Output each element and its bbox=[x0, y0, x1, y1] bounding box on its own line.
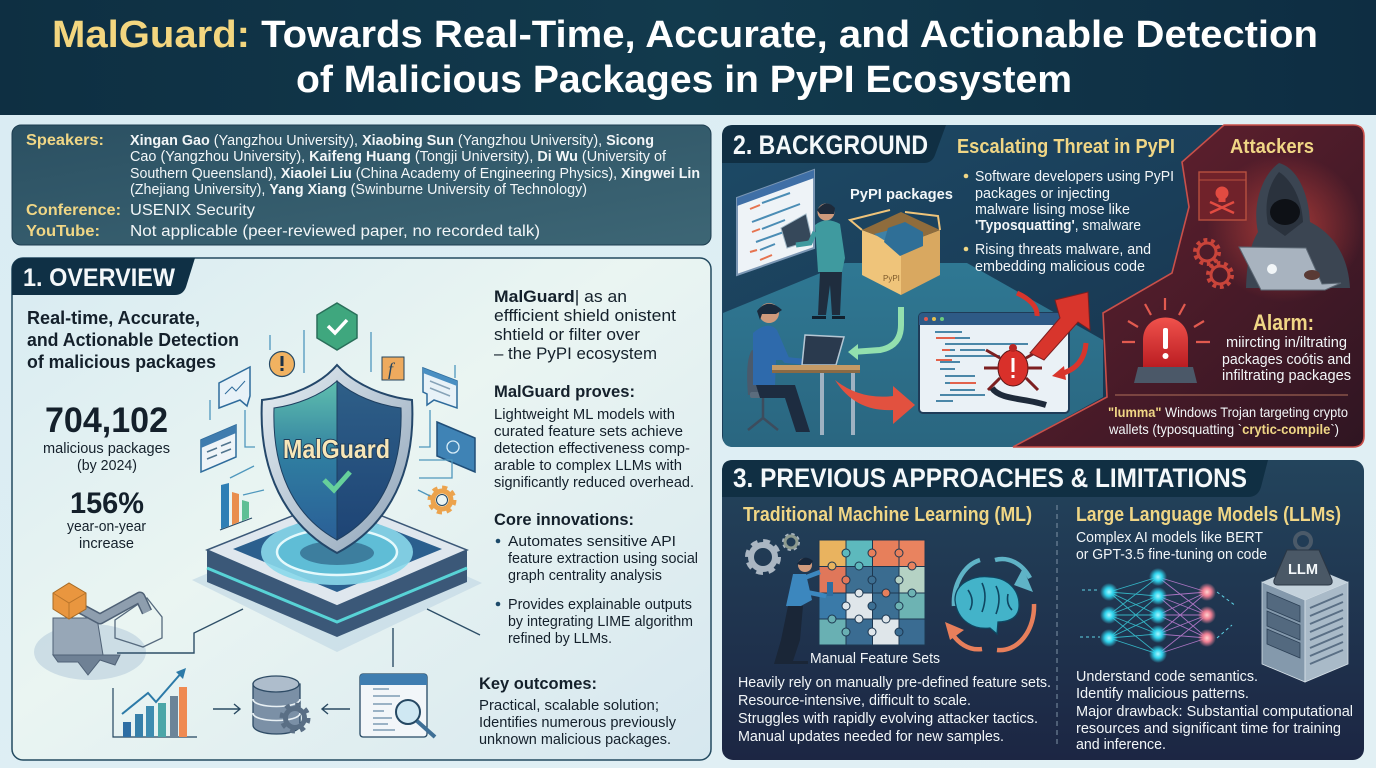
illustration: neural network bbox=[1080, 568, 1236, 663]
LLM intro text bbox=[1076, 530, 1267, 563]
red glow behind hacker bbox=[1207, 154, 1363, 302]
icon: bar mini chart bbox=[220, 483, 252, 530]
stat: 156%: 156% bbox=[70, 487, 144, 520]
threat bullets: packages or injecting bbox=[975, 186, 1110, 202]
icon: LLM weight: LLM bbox=[1288, 561, 1318, 578]
overview subtitle: and Actionable Detection bbox=[27, 330, 239, 350]
background heading: 2. BACKGROUND bbox=[733, 130, 928, 160]
illustration: seated developer bbox=[747, 303, 860, 435]
icon: brain with cycle arrows bbox=[945, 559, 1034, 650]
lumma trojan note: wallets (typosquatting `crytic-compile`) bbox=[1108, 421, 1339, 437]
text: MalGuard intro: shtield or filter over bbox=[494, 325, 640, 344]
conference row bbox=[26, 202, 255, 219]
shield check bbox=[324, 472, 350, 490]
traditional ML heading: Traditional Machine Learning (ML) bbox=[743, 504, 1032, 526]
text: MalGuard proves bbox=[494, 382, 694, 491]
speakers list: Cao (Yangzhou University), Kaifeng Huang (Tongji University), Di Wu (University of bbox=[130, 149, 667, 165]
alarm text bbox=[1222, 310, 1351, 384]
text: core innovations: Automates sensitive API bbox=[508, 534, 676, 550]
overview subtitle: Real-time, Accurate, bbox=[27, 308, 200, 328]
icon: function tag bbox=[382, 357, 404, 380]
arrow: red to window bbox=[835, 380, 915, 424]
threat bullets: embedding malicious code bbox=[975, 259, 1145, 275]
LLM capability text: Identify malicious patterns. bbox=[1076, 686, 1249, 702]
LLM capability text: Understand code semantics. bbox=[1076, 669, 1258, 685]
illustration: skull window bbox=[1199, 172, 1246, 220]
icon: function tag: f bbox=[388, 359, 396, 379]
shield label: MalGuard bbox=[283, 434, 390, 464]
icon: LLM weight bbox=[1274, 533, 1332, 585]
text: MalGuard intro bbox=[494, 287, 676, 363]
text: core innovations: graph centrality analysis bbox=[508, 568, 662, 584]
stat: 704,102: malicious packages bbox=[43, 440, 170, 457]
speakers list: Southern Queensland), Xiaolei Liu (China Academy of Engineering Physics), Xingwei Lin bbox=[130, 166, 700, 182]
icon: ML gears bbox=[749, 535, 798, 571]
icon: MalGuard shield bbox=[262, 365, 412, 553]
alarm text: infiltrating packages bbox=[1222, 368, 1351, 384]
text: core innovations: Provides explainable outputs bbox=[508, 597, 692, 613]
text: core innovations: by integrating LIME algorithm bbox=[508, 614, 693, 630]
attackers heading: Attackers bbox=[1230, 136, 1314, 158]
red attackers zone bbox=[1013, 125, 1364, 447]
LLM capability text: and inference. bbox=[1076, 737, 1166, 753]
text: MalGuard intro: MalGuard| as an bbox=[494, 287, 627, 306]
ML limitations text bbox=[738, 675, 1051, 745]
LLM intro text: Complex AI models like BERT bbox=[1076, 530, 1263, 546]
text: key outcomes: unknown malicious packages. bbox=[479, 732, 671, 748]
ML limitations text: Heavily rely on manually pre-defined feature sets. bbox=[738, 675, 1051, 691]
text: key outcomes: Practical, scalable solution; bbox=[479, 698, 659, 714]
threat bullets: Software developers using PyPI bbox=[975, 169, 1174, 185]
LLM heading: Large Language Models (LLMs) bbox=[1076, 504, 1341, 526]
threat bullets: 'Typosquatting', smalware bbox=[975, 218, 1141, 234]
icon: chart window bbox=[219, 367, 250, 408]
text: core innovations: feature extraction using social bbox=[508, 551, 698, 567]
previous approaches heading: 3. PREVIOUS APPROACHES & LIMITATIONS bbox=[733, 463, 1247, 493]
stat: 704,102: 704,102 bbox=[45, 401, 168, 440]
title banner bbox=[0, 0, 1376, 115]
illustration: puzzle grid bbox=[819, 540, 925, 645]
illustration: package box bbox=[850, 210, 940, 295]
illustration: red bug bbox=[984, 344, 1046, 405]
illustration: big code screen bbox=[737, 170, 814, 275]
LLM capability text: Major drawback: Substantial computational bbox=[1076, 704, 1353, 720]
ML limitations text: Struggles with rapidly evolving attacker tactics. bbox=[738, 711, 1038, 727]
panel: overview bbox=[12, 258, 711, 760]
arrow: green head bbox=[848, 344, 858, 360]
text: MalGuard proves: MalGuard proves: bbox=[494, 382, 635, 401]
text: MalGuard intro: effficient shield onistent bbox=[494, 306, 676, 325]
arrow: big red up bbox=[1030, 292, 1090, 360]
lumma trojan note bbox=[1108, 404, 1348, 437]
pypi packages label: PyPI packages bbox=[850, 186, 953, 203]
stat: 156%: increase bbox=[79, 535, 134, 552]
overview heading bbox=[12, 258, 195, 295]
icon: code window with magnifier bbox=[360, 674, 435, 737]
ML limitations text: Resource-intensive, difficult to scale. bbox=[738, 693, 971, 709]
title line 2: of Malicious Packages in PyPI Ecosystem bbox=[296, 59, 1072, 101]
arrow: chart to database bbox=[213, 704, 240, 714]
icon: warning circle bbox=[270, 352, 294, 376]
icon: blue code card bbox=[437, 422, 475, 472]
text: MalGuard intro: – the PyPI ecosystem bbox=[494, 344, 657, 363]
LLM intro text: or GPT-3.5 fine-tuning on code bbox=[1076, 547, 1267, 563]
alarm text: Alarm: bbox=[1253, 310, 1314, 335]
stat: 704,102 bbox=[43, 401, 170, 474]
text: core innovations bbox=[494, 510, 698, 647]
icon: green hexagon check bbox=[317, 303, 357, 350]
connector lines bbox=[117, 609, 480, 667]
panel: speakers bbox=[12, 125, 711, 245]
threat bullets bbox=[964, 169, 1174, 275]
speakers label: Speakers: bbox=[26, 132, 104, 149]
alarm text: miircting in/iltrating bbox=[1226, 335, 1347, 351]
title line 1: MalGuard: Towards Real-Time, Accurate, and Actionable Detection bbox=[52, 14, 1318, 56]
text: MalGuard proves: Lightweight ML models with bbox=[494, 407, 675, 423]
LLM capability text: resources and significant time for training bbox=[1076, 721, 1341, 737]
text: key outcomes: Key outcomes: bbox=[479, 674, 597, 693]
lumma trojan note: "lumma" Windows Trojan targeting crypto bbox=[1108, 404, 1348, 420]
illustration: standing developer bbox=[781, 203, 845, 319]
overview heading: 1. OVERVIEW bbox=[23, 264, 175, 292]
panel: previous approaches bbox=[722, 460, 1364, 760]
youtube row: Not applicable (peer-reviewed paper, no recorded talk) bbox=[130, 223, 540, 240]
illustration: robot arm bbox=[34, 583, 162, 680]
conference row: USENIX Security bbox=[130, 202, 255, 219]
text: MalGuard proves: significantly reduced overhead. bbox=[494, 475, 694, 491]
text: MalGuard proves: curated feature sets achieve bbox=[494, 424, 683, 440]
threat bullets: malware lising mose like bbox=[975, 202, 1130, 218]
icon: speech window bbox=[423, 368, 457, 408]
text: core innovations: Core innovations: bbox=[494, 510, 634, 529]
ML limitations text: Manual updates needed for new samples. bbox=[738, 729, 1004, 745]
overview subtitle: of malicious packages bbox=[27, 352, 216, 372]
floating circuit lines bbox=[210, 330, 455, 496]
illustration: rising bar chart bbox=[113, 668, 197, 737]
illustration: platform bbox=[192, 498, 482, 652]
text: core innovations: refined by LLMs. bbox=[508, 631, 612, 647]
icon: database with gear bbox=[253, 676, 307, 734]
floor area bbox=[723, 263, 1103, 447]
divider in alarm area bbox=[1115, 394, 1348, 396]
alarm text: packages coótis and bbox=[1222, 352, 1351, 368]
illustration: server tower bbox=[1262, 564, 1348, 682]
stat: 156%: year-on-year bbox=[67, 518, 146, 535]
arrow: small red curves bbox=[1017, 293, 1086, 380]
text: key outcomes: Identifies numerous previously bbox=[479, 715, 677, 731]
text: MalGuard proves: arable to complex LLMs with bbox=[494, 458, 682, 474]
text: MalGuard proves: detection effectiveness comp- bbox=[494, 441, 690, 457]
escalating threat heading: Escalating Threat in PyPI bbox=[957, 136, 1175, 158]
speakers list: Xingan Gao (Yangzhou University), Xiaobing Sun (Yangzhou University), Sicong bbox=[130, 133, 654, 149]
illustration: hooded hacker bbox=[1239, 163, 1350, 290]
arrow: window to database bbox=[322, 704, 350, 714]
panel: background bbox=[722, 125, 1364, 447]
manual feature sets caption: Manual Feature Sets bbox=[810, 650, 940, 667]
text: key outcomes bbox=[479, 674, 677, 748]
stat: 704,102: (by 2024) bbox=[77, 457, 137, 474]
arrow: green curve bbox=[852, 307, 901, 352]
stat: 156% bbox=[67, 487, 146, 552]
illustration: infected code window bbox=[919, 313, 1069, 413]
LLM capability text bbox=[1076, 669, 1353, 753]
icon: form window bbox=[201, 425, 236, 472]
conference row: Conference: bbox=[26, 202, 121, 219]
icon: alarm siren bbox=[1122, 298, 1210, 383]
speakers list bbox=[130, 133, 700, 198]
illustration: package box: PyPI bbox=[883, 274, 900, 283]
overview subtitle bbox=[27, 308, 239, 372]
illustration: red gears bbox=[1196, 241, 1231, 286]
speakers list: (Zhejiang University), Yang Xiang (Swinburne University of Technology) bbox=[130, 182, 587, 198]
threat bullets: Rising threats malware, and bbox=[975, 242, 1151, 258]
youtube row: YouTube: bbox=[26, 223, 100, 240]
icon: orange gear bbox=[431, 489, 453, 511]
illustration: person placing puzzle piece bbox=[774, 558, 833, 664]
